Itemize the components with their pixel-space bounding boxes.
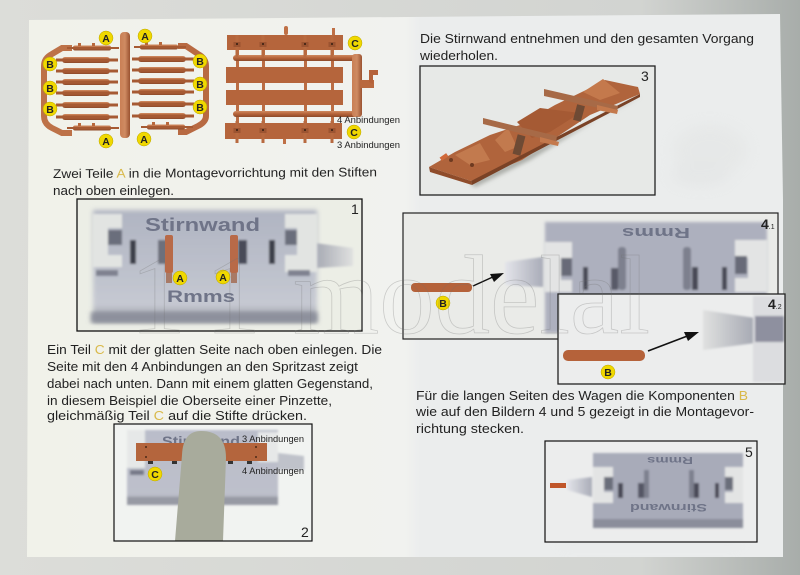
text block: step 2	[47, 343, 382, 423]
jig close-up	[703, 296, 784, 382]
text block: step 1: Zwei Teile A in die Montagevorrichtung mit den Stiften	[53, 165, 377, 181]
labels and badge: C	[151, 469, 159, 481]
frame and number 1: 1	[351, 201, 359, 217]
frame and number 1	[77, 199, 362, 331]
text block: step 4: Für die langen Seiten des Wagen die Komponenten B	[416, 389, 748, 403]
arrow	[648, 332, 699, 351]
block lettering: Stirnwand	[162, 433, 240, 449]
badges A B C: A	[141, 31, 149, 43]
sprue A and B	[44, 32, 206, 138]
frame and number 4.1	[403, 213, 778, 339]
panel: photo 5	[545, 441, 757, 542]
labels and badge	[148, 434, 304, 481]
flipped lettering	[630, 454, 707, 513]
labels and badge: 4 Anbindungen	[242, 466, 304, 477]
parts A placed	[165, 235, 238, 285]
badges A B C: B	[46, 83, 54, 95]
sprue C	[225, 26, 378, 144]
text block: step 4: richtung stecken.	[416, 422, 524, 436]
jig block	[505, 222, 767, 333]
text block: step 1: nach oben einlegen.	[53, 184, 174, 198]
badges A B C: B	[196, 79, 204, 91]
frame and number 5: 5	[745, 444, 753, 460]
badges A B C: B	[46, 104, 54, 116]
frame and number 4.2	[558, 294, 785, 384]
parts A placed: A	[176, 273, 184, 285]
frame and number 3	[420, 66, 655, 195]
badges A B C: B	[196, 102, 204, 114]
text block: step 3	[419, 32, 754, 63]
part C	[136, 443, 267, 464]
panel: photo 3	[420, 66, 655, 195]
tweezers	[175, 431, 226, 541]
block lettering	[145, 215, 260, 306]
part B: B	[439, 298, 447, 310]
text block: step 3: Die Stirnwand entnehmen und den gesamten Vorgang	[420, 32, 754, 46]
panel: photo 4.2	[558, 294, 785, 384]
faint show-through from reverse side	[560, 124, 748, 545]
watermark: modelal	[293, 234, 650, 358]
badges A B C: A	[140, 134, 148, 146]
flipped lettering: Stirnwand	[630, 501, 707, 513]
text block: step 1	[53, 165, 377, 198]
badges A B C: C	[351, 38, 359, 50]
arrow	[473, 273, 504, 286]
text block: step 2: gleichmäßig Teil C auf die Stifte drücken.	[47, 409, 307, 423]
badges A B C: B	[46, 59, 54, 71]
frame and number 2	[114, 424, 312, 541]
watermark: 1	[130, 234, 186, 358]
part B tip	[550, 483, 566, 488]
badges A B C: C	[350, 127, 358, 139]
labels: connection counts: 4 Anbindungen	[337, 115, 400, 126]
badges A B C: A	[102, 136, 110, 148]
assembled end wall model	[429, 79, 640, 187]
jig block	[127, 430, 304, 505]
frame and number 4.1: 4.1	[761, 216, 775, 232]
part B	[411, 283, 472, 310]
jig block	[567, 453, 743, 528]
flipped lettering: Rmms	[622, 224, 690, 241]
badges A B C: A	[102, 33, 110, 45]
panel: photo 1	[77, 199, 362, 331]
labels: connection counts	[337, 115, 400, 151]
flipped lettering: Rmms	[646, 454, 693, 465]
labels: connection counts: 3 Anbindungen	[337, 140, 400, 151]
frame and number 3: 3	[641, 68, 649, 84]
badges A B C	[43, 29, 362, 148]
panel: photo 2	[114, 424, 312, 541]
text block: step 2: dabei nach unten. Dann mit einem glatten Gegenstand,	[47, 377, 373, 391]
text block: step 4	[415, 389, 754, 436]
text block: step 4: wie auf den Bildern 4 und 5 gezeigt in die Montagevor-	[415, 405, 754, 419]
watermark	[130, 234, 650, 358]
panel: sprue parts overview	[43, 26, 400, 151]
watermark: 1	[205, 234, 261, 358]
text block: step 3: wiederholen.	[419, 49, 498, 63]
parts A placed: A	[219, 272, 227, 284]
labels and badge: 3 Anbindungen	[242, 434, 304, 445]
frame and number 4.2: 4.2	[768, 296, 782, 312]
frame and number 5	[545, 441, 757, 542]
text block: step 2: Ein Teil C mit der glatten Seite nach oben einlegen. Die	[47, 343, 382, 357]
assembly jig block	[91, 210, 353, 323]
block lettering: Rmms	[167, 287, 235, 306]
text block: step 2: in diesem Beispiel die Oberseite einer Pinzette,	[47, 394, 332, 408]
panel: photo 4.1	[403, 213, 778, 339]
text block: step 2: Seite mit den 4 Anbindungen an den Spritzast zeigt	[47, 360, 359, 374]
block lettering: Stirnwand	[145, 215, 260, 235]
badges A B C: B	[196, 56, 204, 68]
frame and number 2: 2	[301, 524, 309, 540]
part B	[563, 350, 645, 379]
part B: B	[604, 367, 612, 379]
